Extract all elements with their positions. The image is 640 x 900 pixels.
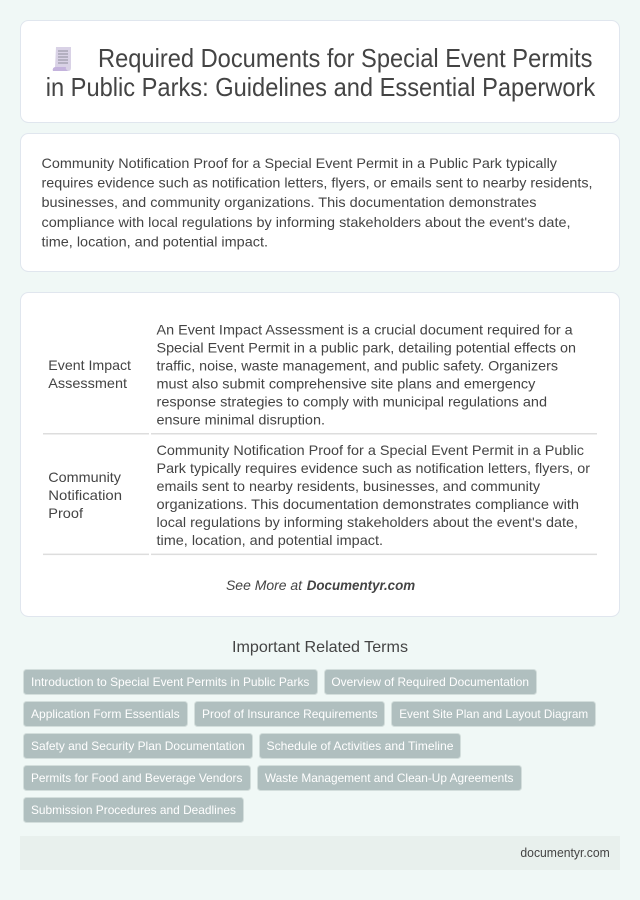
panel: summary paragraph: time, location, and potential impact. (42, 233, 268, 249)
tag row 2 (24, 702, 596, 726)
tag row 1: Overview of Required Documentation (331, 675, 529, 689)
table row: community notification proof: organizations. This documentation demonstrates compliance with (156, 496, 579, 512)
related term tags (24, 670, 596, 822)
panel: summary paragraph: requires evidence such as notification letters, flyers, or emails sent to nearby residents, (42, 175, 592, 191)
table row: community notification proof: Notification (48, 487, 122, 503)
table row: community notification proof (43, 442, 597, 555)
panel: documents table (20, 292, 620, 616)
table row: event impact assessment (43, 321, 597, 434)
table row: event impact assessment: Assessment (48, 375, 127, 391)
tag row 4 (24, 766, 522, 790)
table row: event impact assessment: An Event Impact Assessment is a crucial document required for a (156, 321, 573, 337)
panel: summary paragraph (20, 134, 620, 272)
link: see more: Documentyr.com (307, 577, 415, 593)
heading: important related terms: Important Related Terms (232, 639, 408, 656)
tag row 5: Submission Procedures and Deadlines (31, 803, 236, 817)
table row: community notification proof: Community Notification Proof for a Special Event Permit in a Public (156, 442, 584, 458)
table row: event impact assessment: Event Impact (48, 357, 131, 373)
panel: title card (20, 20, 620, 122)
table row: community notification proof: Proof (48, 505, 83, 521)
panel: summary paragraph: Community Notification Proof for a Special Event Permit in a Public Park typically (42, 155, 557, 171)
tag row 4: Permits for Food and Beverage Vendors (31, 771, 242, 785)
tag row 3: Safety and Security Plan Documentation (31, 739, 245, 753)
table row: community notification proof: emails sent to nearby residents, businesses, and community (156, 478, 540, 494)
tag row 1: Introduction to Special Event Permits in Public Parks (31, 675, 309, 689)
tag row 3: Schedule of Activities and Timeline (266, 739, 454, 753)
table row: event impact assessment: traffic, noise, waste management, and public safety. Organizers (156, 357, 558, 373)
link: see more: See More at (226, 577, 303, 593)
tag row 1 (24, 670, 536, 694)
footer bar (20, 836, 620, 870)
tag row 2: Proof of Insurance Requirements (202, 707, 378, 721)
tag row 3 (24, 734, 460, 758)
table row: event impact assessment: response strategies to comply with municipal regulations and (156, 393, 547, 409)
table row: event impact assessment: ensure minimal disruption. (156, 411, 325, 427)
table row: community notification proof: Park typically requires evidence such as notification letters, flyers, or (156, 460, 590, 476)
tag row 2: Application Form Essentials (31, 707, 180, 721)
table row: community notification proof: local regulations by informing stakeholders about the event's date, (156, 514, 578, 530)
table row: community notification proof: Community (48, 469, 121, 485)
table row: event impact assessment: Special Event Permit in a public park, detailing potential effects on (156, 339, 576, 355)
tag row 4: Waste Management and Clean-Up Agreements (265, 771, 514, 785)
title (46, 43, 596, 102)
tag row 5 (24, 798, 244, 822)
tag row 2: Event Site Plan and Layout Diagram (399, 707, 588, 721)
table row: event impact assessment: must also submit comprehensive site plans and emergency (156, 375, 535, 391)
panel: summary paragraph: compliance with local regulations by informing stakeholders about the event's date, (42, 214, 570, 230)
icon: document scroll (53, 47, 71, 71)
title: in Public Parks: Guidelines and Essential Paperwork (46, 72, 596, 102)
title: Required Documents for Special Event Permits (98, 43, 592, 73)
link: see more (226, 577, 415, 593)
footer bar: documentyr.com (520, 846, 610, 860)
table row: community notification proof: time, location, and potential impact. (156, 532, 383, 548)
panel: summary paragraph: businesses, and community organizations. This documentation demonstrates (42, 194, 536, 210)
